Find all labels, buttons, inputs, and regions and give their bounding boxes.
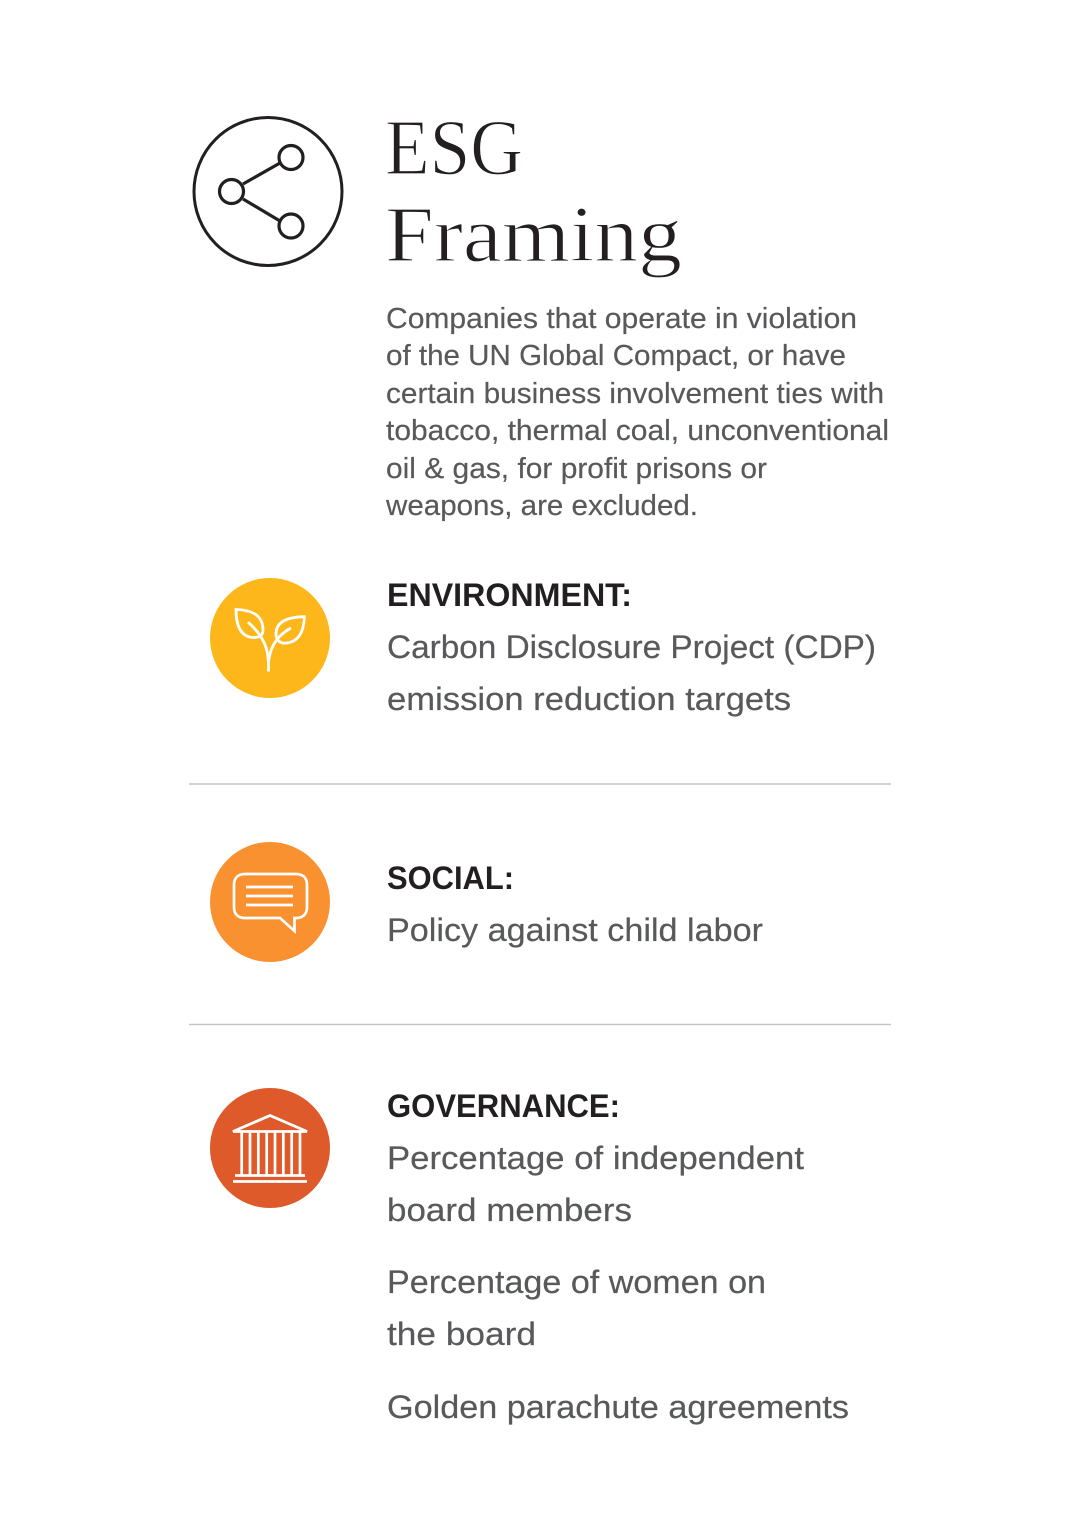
intro paragraph: of the UN Global Compact, or have (386, 340, 846, 372)
heading: governance: GOVERNANCE: (387, 1088, 620, 1124)
icon: share network (194, 118, 342, 266)
environment text: emission reduction targets (387, 681, 791, 717)
icon: governance building (210, 1088, 330, 1208)
environment text: Carbon Disclosure Project (CDP) (387, 629, 876, 665)
governance text: board members (387, 1192, 632, 1228)
governance text: Golden parachute agreements (387, 1389, 849, 1425)
intro paragraph: weapons, are excluded. (385, 490, 698, 522)
governance text (387, 1140, 849, 1425)
icon: social speech bubble (210, 842, 330, 962)
title (385, 105, 682, 279)
environment text (387, 629, 876, 717)
title: Framing (385, 192, 682, 279)
intro paragraph: tobacco, thermal coal, unconventional (386, 415, 889, 447)
governance text: Percentage of women on (387, 1264, 766, 1300)
intro paragraph: certain business involvement ties with (386, 378, 884, 410)
title: ESG (385, 105, 523, 192)
heading: environment: ENVIRONMENT: (387, 577, 632, 613)
governance text: the board (387, 1316, 536, 1352)
intro paragraph: Companies that operate in violation (386, 303, 857, 335)
intro paragraph: oil & gas, for profit prisons or (386, 453, 767, 485)
social text: Policy against child labor (387, 912, 763, 948)
governance text: Percentage of independent (387, 1140, 804, 1176)
icon: environment plant (210, 578, 330, 698)
heading: social: SOCIAL: (387, 860, 514, 896)
intro paragraph (385, 303, 889, 522)
